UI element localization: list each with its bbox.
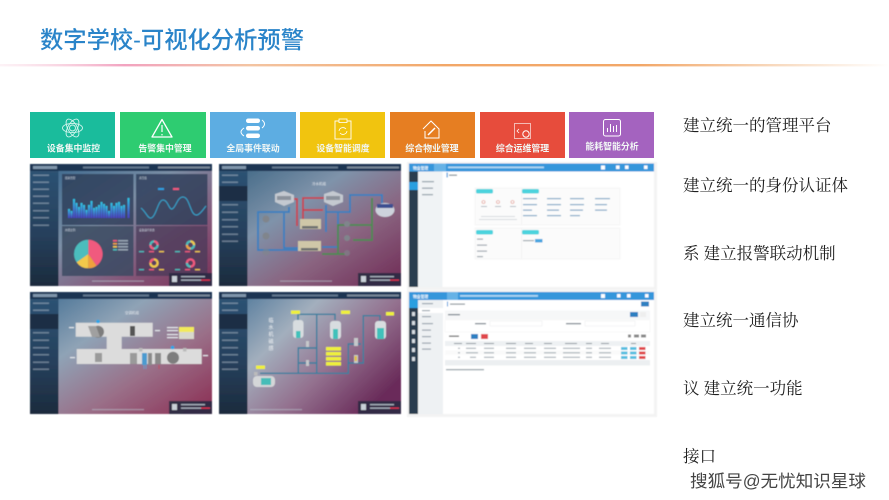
notification box (169, 401, 212, 414)
chart: bar chart panel (62, 174, 134, 225)
chart: bar chart panel: 能耗管理 (65, 176, 76, 180)
text block: platform points: 议 建立统一功能 (683, 379, 803, 398)
cards (475, 188, 620, 259)
chart: water system pipe diagram: 感 (268, 345, 274, 352)
chart: donut charts panel (136, 226, 208, 276)
text block: platform points: 系 建立报警联动机制 (683, 244, 836, 263)
panel: property admin screenshot (407, 162, 657, 290)
tile: property management (390, 112, 475, 158)
notification box (169, 273, 212, 286)
chart: donut charts panel: 设备运行状态 (139, 228, 155, 232)
panel: admin table screenshot: 物业管理 (413, 294, 428, 299)
chart: water system pipe diagram: 机 (268, 331, 274, 338)
notification box (358, 401, 401, 414)
tile: device scheduling (300, 112, 385, 158)
tile: device scheduling: 设备智能调度 (316, 142, 370, 154)
chart: line chart panel (136, 174, 208, 225)
chart: line chart panel: 承压值 (139, 176, 147, 180)
tile: energy analysis (569, 112, 654, 158)
text block: platform points: 建立统一的管理平台 (683, 116, 832, 135)
chart: water system pipe diagram: 磁 (268, 338, 274, 345)
tile: energy analysis: 能耗智能分析 (585, 140, 639, 152)
text block: platform points: 建立统一的身份认证体 (683, 176, 848, 195)
panel: water system screenshot (219, 292, 401, 414)
panel: property admin screenshot: 物业管理 (413, 166, 428, 170)
tile: operations management: 综合运维管理 (496, 142, 549, 154)
data table (445, 334, 650, 370)
tile: device monitoring (30, 112, 115, 158)
title: 数字学校-可视化分析预警 (40, 27, 304, 53)
tile: device monitoring: 设备集中监控 (47, 142, 100, 154)
chart: water system pipe diagram (253, 310, 394, 387)
chart: pie chart panel (62, 226, 134, 276)
text block: platform points: 接口 (683, 447, 716, 466)
notification box (358, 273, 401, 286)
chart: pie chart panel: 用能比例 (65, 228, 76, 232)
text block: platform points: 建立统一通信协 (683, 311, 799, 330)
chart: air handling unit diagram (69, 310, 208, 369)
tile: event linkage: 全局事件联动 (226, 142, 280, 154)
watermark: 搜狐号@无忧知识星球 (690, 471, 866, 491)
panel: dashboard screenshot (30, 164, 212, 286)
header gradient rule (0, 64, 889, 66)
tile: operations management (480, 112, 565, 158)
chart: water system pipe diagram: 水 (268, 324, 274, 331)
tile: event linkage (210, 112, 296, 158)
panel: feature tiles (30, 112, 654, 158)
panel: admin table screenshot (407, 290, 657, 417)
panel: chiller plant screenshot (219, 164, 401, 286)
chart: chiller plant pipe diagram (258, 181, 394, 256)
chart: water system pipe diagram: 临 (268, 317, 274, 324)
search form (445, 310, 650, 332)
chart: chiller plant pipe diagram: 冷水机组 (312, 181, 326, 186)
text block: platform points (683, 116, 848, 466)
panel: air handling unit screenshot (30, 292, 212, 414)
chart: air handling unit diagram: 空调机组 (125, 310, 139, 315)
tile: alarm management (120, 112, 206, 158)
tile: property management: 综合物业管理 (405, 142, 459, 154)
tile: alarm management: 告警集中管理 (138, 142, 192, 154)
